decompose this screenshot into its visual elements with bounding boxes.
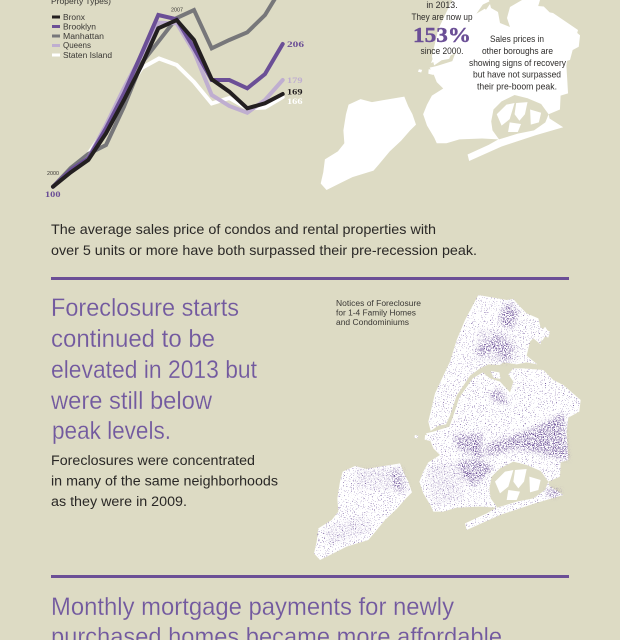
value label: 169: 169 [287,86,302,96]
dot layer: concentrated notices [323,300,571,546]
callout: 153 percent since 2000: since 2000. [420,46,464,56]
heading: foreclosure starts: were still below [50,387,213,415]
line: Brooklyn [53,15,283,187]
text block: other boroughs: other boroughs are [482,46,553,56]
heading: foreclosure starts: Foreclosure starts [51,294,239,322]
year label: 2000: 2000 [47,171,59,177]
text block: concentrated neighborhoods: as they were in 2009. [51,494,187,509]
text block: other boroughs: but have not surpassed [473,70,561,80]
text block: condos and rentals [51,221,477,258]
value label: 179: 179 [287,75,302,85]
line: Manhattan [53,0,276,187]
value label: 100: 100 [45,189,60,199]
value label: 166: 166 [287,96,302,106]
year label: 2007: 2007 [171,8,183,14]
text block: condos and rentals: The average sales price of condos and rental properties with [51,221,436,237]
text block: condos and rentals: over 5 units or more have both surpassed their pre-recession peak. [51,242,477,258]
legend: Queens [63,41,91,50]
map label: notices of foreclosure: Notices of Foreclosure [336,299,421,308]
text block: concentrated neighborhoods: in many of the same neighborhoods [51,474,278,488]
text block: other boroughs [469,34,567,92]
legend: Staten Island [63,51,112,60]
line: Queens [53,23,283,187]
legend [51,0,112,60]
line: Bronx [53,20,283,187]
callout: 153 percent since 2000 [412,0,473,56]
heading: monthly mortgage payments: Monthly mortgage payments for newly [51,593,454,621]
callout: 153 percent since 2000: in 2013. [426,0,458,10]
legend: Brooklyn [63,22,96,32]
text block: other boroughs: showing signs of recovery [469,58,567,68]
line chart: sales price index by borough [45,0,304,199]
callout: 153 percent since 2000: They are now up [412,12,473,22]
legend: Manhattan [63,32,104,41]
callout: 153 percent since 2000: 153% [413,23,471,47]
text block: concentrated neighborhoods: Foreclosures were concentrated [51,453,255,468]
heading: foreclosure starts: peak levels. [52,417,171,445]
heading: monthly mortgage payments [51,593,502,640]
line: Staten Island [53,58,283,187]
text block: other boroughs: Sales prices in [490,34,544,44]
dot layer: sparse citywide notices [314,295,580,559]
value label: 206: 206 [287,39,304,49]
map label: notices of foreclosure: for 1-4 Family Homes [336,308,416,318]
heading: foreclosure starts: elevated in 2013 but [51,356,257,384]
text block: concentrated neighborhoods [51,453,278,509]
map label: notices of foreclosure: and Condominiums [336,318,409,327]
heading: foreclosure starts: continued to be [51,325,215,353]
heading: foreclosure starts [50,294,257,445]
map label: notices of foreclosure [336,299,421,327]
map: foreclosure notices dot map [314,295,581,560]
map: NYC boroughs (top, white) [321,0,580,190]
text block: other boroughs: their pre-boom peak. [477,82,557,92]
legend: Bronx [63,13,85,22]
